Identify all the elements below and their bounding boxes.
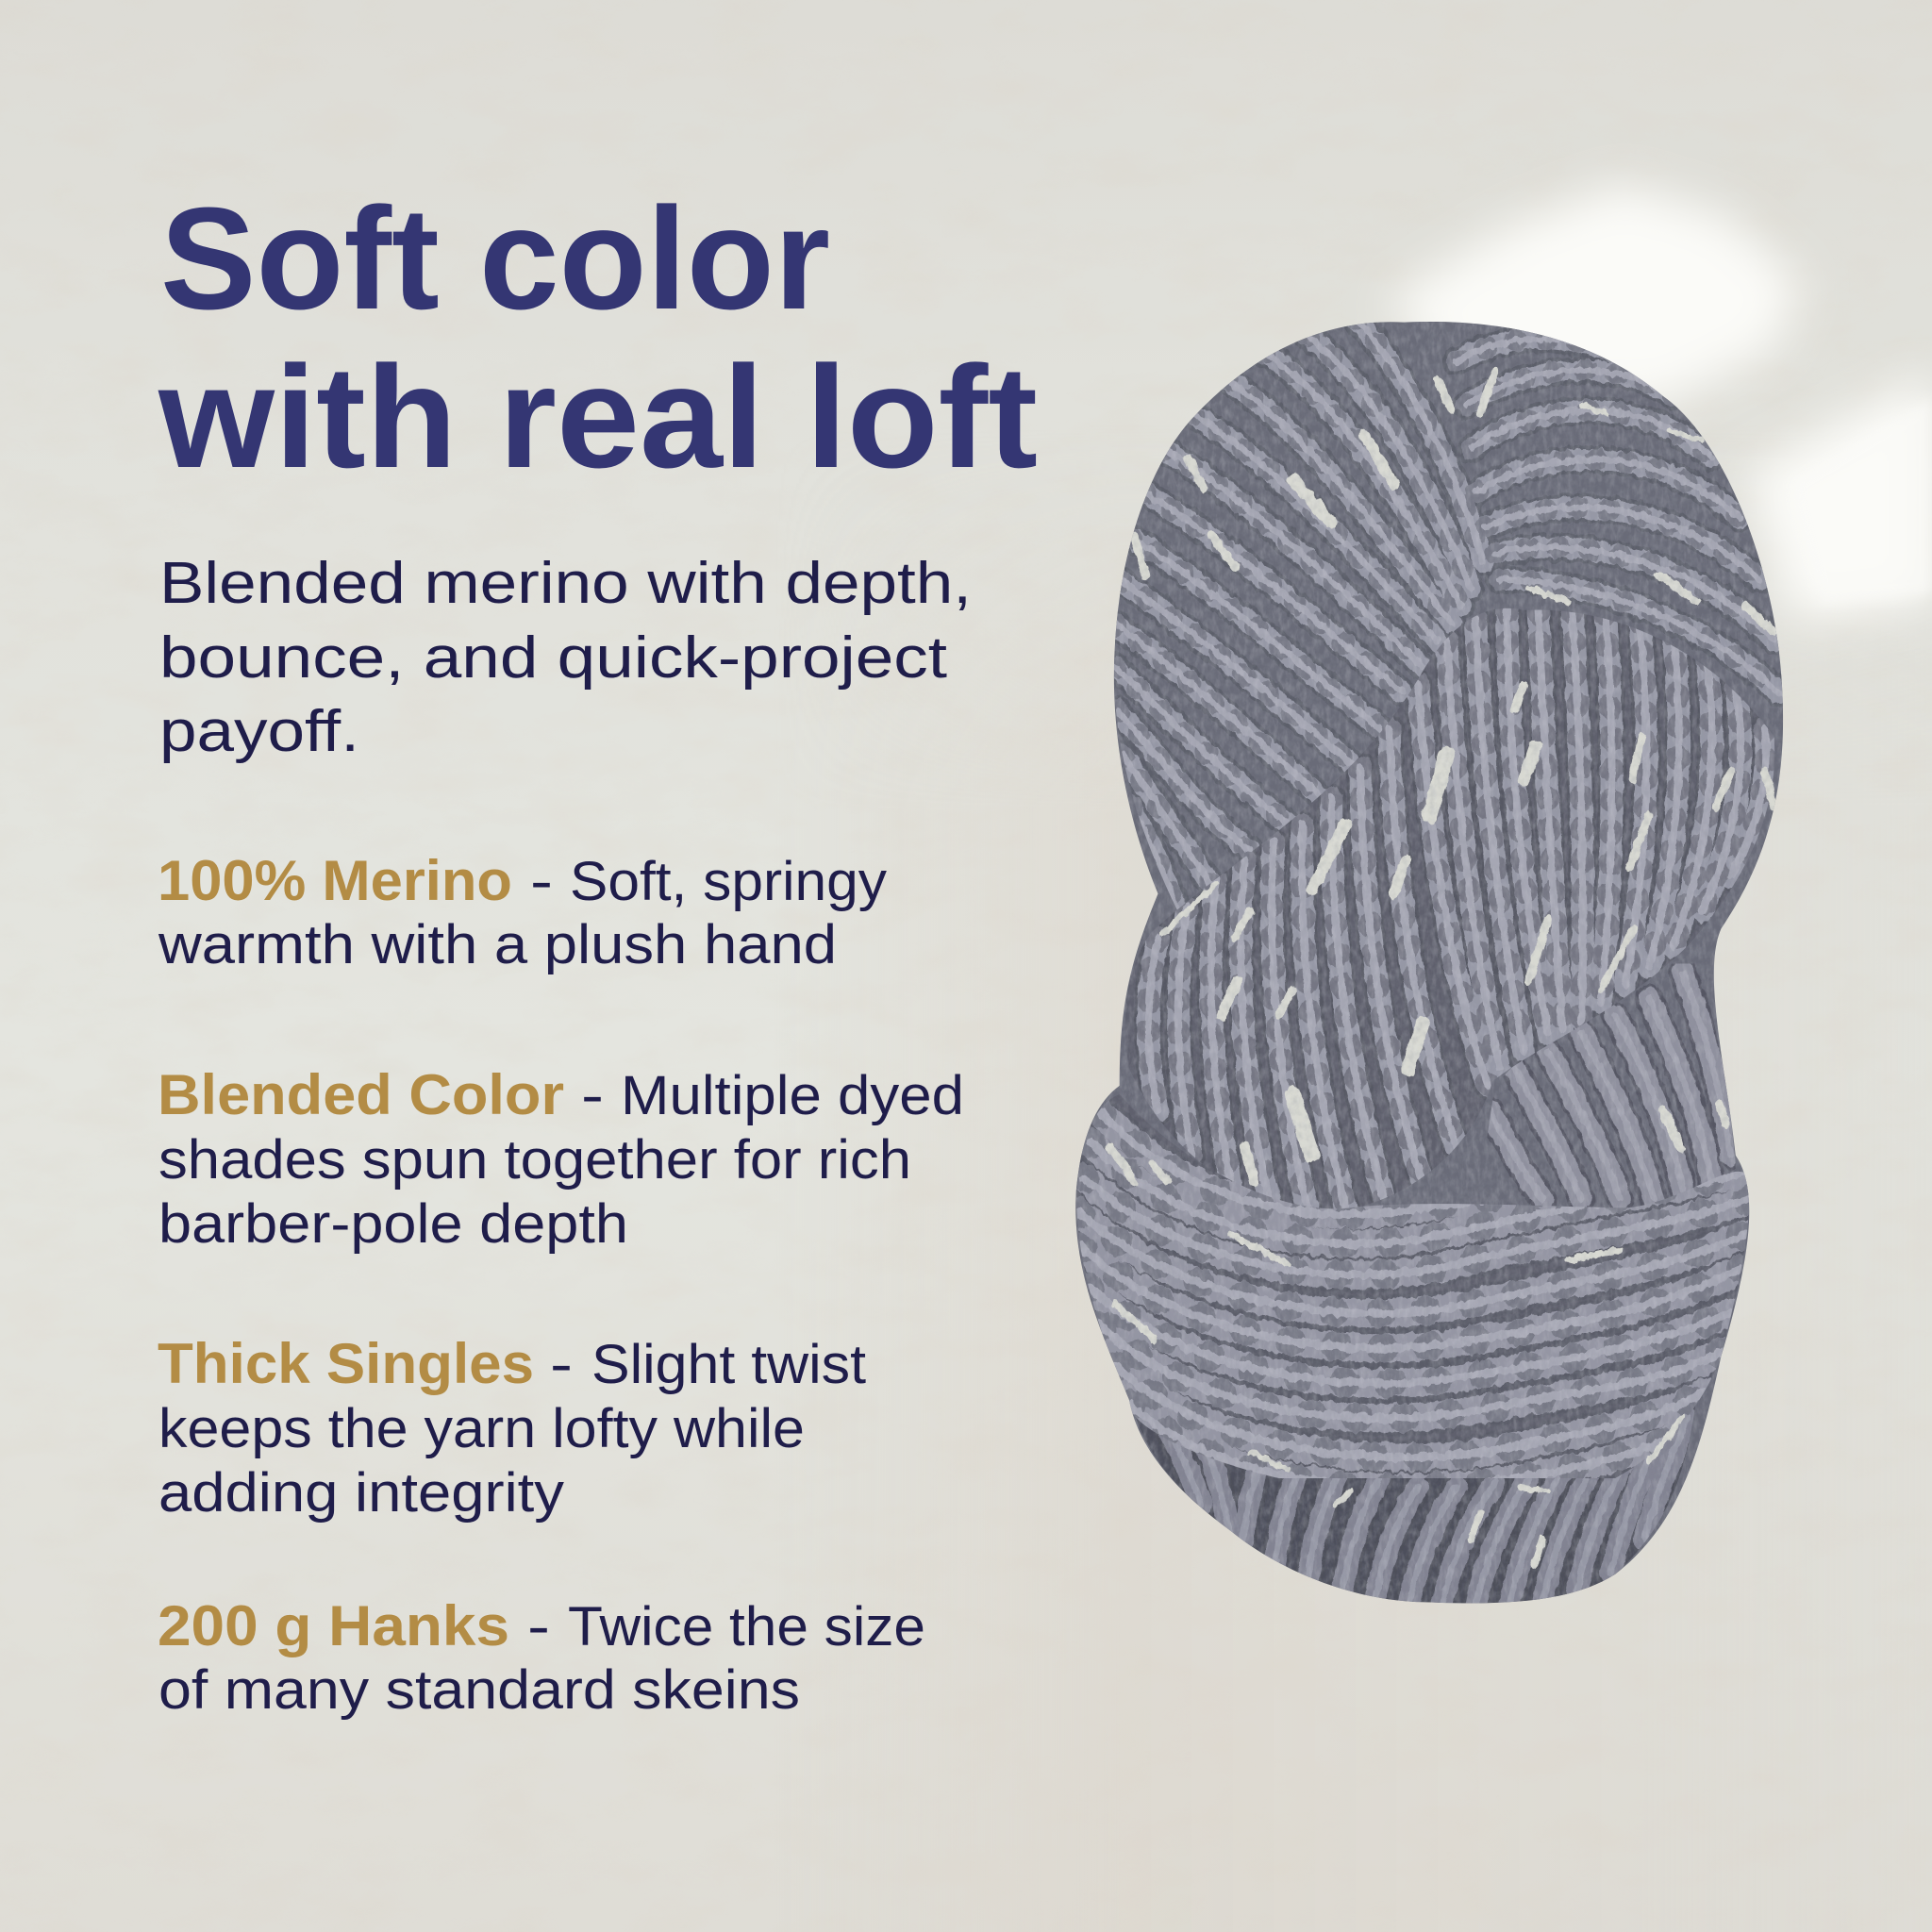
feature: 200 g Hanks: - xyxy=(527,1596,550,1657)
feature: Blended Color: shades spun together for rich xyxy=(158,1129,911,1191)
feature: Blended Color: - xyxy=(581,1065,604,1126)
feature: Blended Color xyxy=(158,1063,964,1255)
feature: 100% Merino xyxy=(158,849,887,975)
feature: Thick Singles xyxy=(158,1332,866,1524)
title: with real loft xyxy=(158,336,1038,498)
feature: Thick Singles: - xyxy=(550,1334,573,1395)
feature: Thick Singles: Thick Singles xyxy=(158,1332,534,1395)
intro paragraph xyxy=(159,551,972,764)
feature: Blended Color: Multiple dyed xyxy=(621,1065,964,1126)
feature: Thick Singles: Slight twist xyxy=(591,1334,866,1395)
feature: Blended Color: barber-pole depth xyxy=(158,1193,628,1255)
feature: 100% Merino: - xyxy=(530,851,553,912)
light patch: window light top right xyxy=(1387,184,1932,623)
feature: 200 g Hanks: Twice the size xyxy=(568,1596,925,1657)
strands: lower right lobe xyxy=(1491,973,1731,1199)
feature: 100% Merino: warmth with a plush hand xyxy=(158,914,837,975)
intro paragraph: bounce, and quick-project xyxy=(159,625,947,691)
fibre texture xyxy=(1038,283,1807,1644)
yarn hank photo xyxy=(1075,322,1783,1604)
feature: 200 g Hanks xyxy=(158,1594,925,1721)
strands: upper lobe xyxy=(1115,318,1779,911)
cream flecks xyxy=(1110,370,1774,1565)
intro paragraph: Blended merino with depth, xyxy=(159,551,972,616)
feature: 100% Merino: Soft, springy xyxy=(570,851,887,912)
feature: 200 g Hanks: of many standard skeins xyxy=(158,1659,800,1721)
title: Soft color xyxy=(160,177,830,340)
strands: foot row xyxy=(1086,1374,1759,1635)
strands: middle twist xyxy=(1125,608,1775,1209)
intro paragraph: payoff. xyxy=(159,699,359,764)
strands: horizontal wrap xyxy=(1062,1068,1784,1505)
feature: 100% Merino: 100% Merino xyxy=(158,849,512,912)
feature: 200 g Hanks: 200 g Hanks xyxy=(158,1594,509,1657)
feature: Thick Singles: keeps the yarn lofty while xyxy=(158,1398,805,1459)
feature: Blended Color: Blended Color xyxy=(158,1063,564,1126)
title xyxy=(158,177,1038,498)
feature: Thick Singles: adding integrity xyxy=(158,1462,564,1524)
